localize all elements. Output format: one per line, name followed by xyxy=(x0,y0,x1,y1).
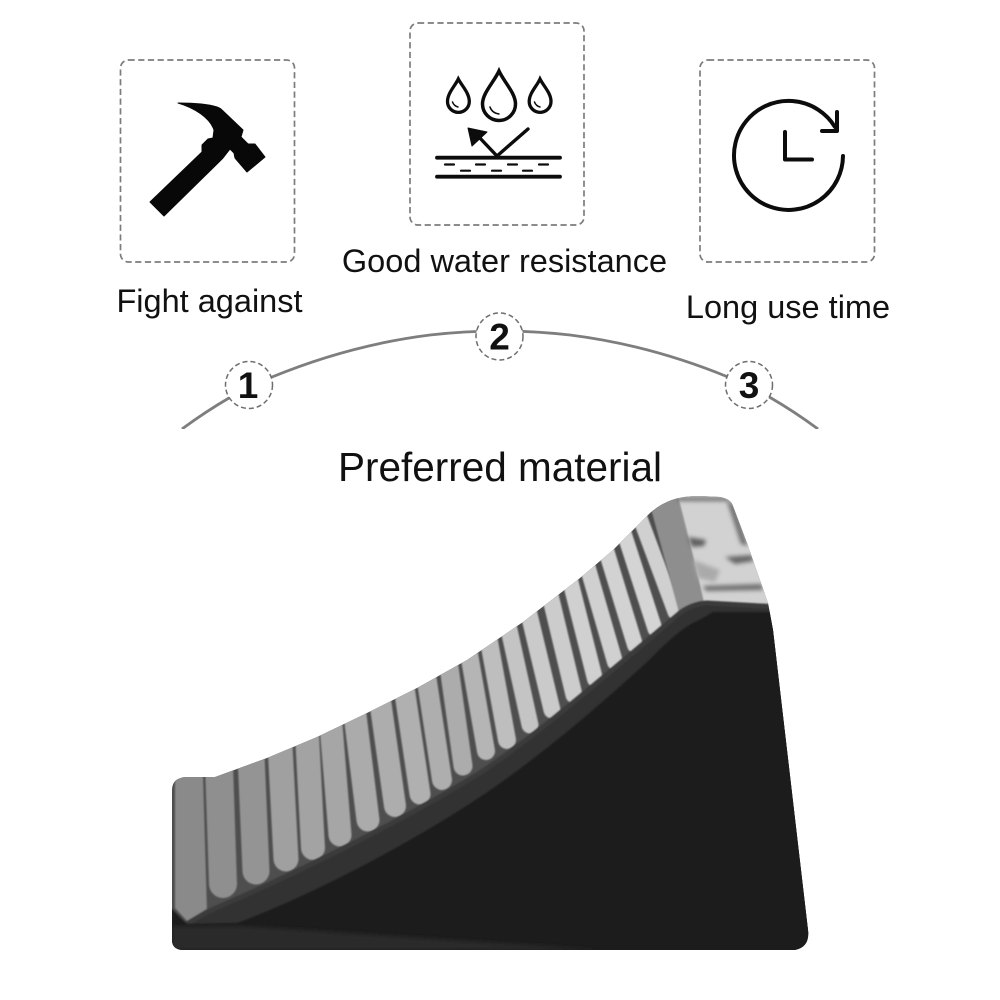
product photo: rubber wheel chock xyxy=(160,480,820,960)
marker 1 xyxy=(226,362,272,408)
card: clock xyxy=(700,60,874,262)
arc line xyxy=(182,331,818,429)
marker 1: 1 xyxy=(238,365,258,406)
icon: hammer xyxy=(150,103,265,216)
chock lip xyxy=(160,603,820,960)
card: water xyxy=(410,23,584,225)
left end strip xyxy=(175,775,207,922)
label: fight against: Fight against xyxy=(116,283,303,319)
icon: water drops on surface xyxy=(437,71,560,177)
panel: fight against xyxy=(116,60,303,319)
chock dark body xyxy=(160,612,820,960)
timeline arc with numbered markers xyxy=(182,313,818,429)
lower front edge shading xyxy=(172,926,546,950)
panel: long use time xyxy=(686,60,890,325)
marker 3: 3 xyxy=(739,365,759,406)
tread ribs xyxy=(219,518,675,884)
end cap xyxy=(651,496,770,612)
marker 2: 2 xyxy=(489,316,510,358)
card: hammer xyxy=(120,60,294,262)
marker 3 xyxy=(726,362,772,408)
marker 2 xyxy=(476,313,523,360)
chock ribbed top surface base xyxy=(160,480,820,960)
label: good water resistance: Good water resistance xyxy=(342,243,667,279)
panel: water resistance xyxy=(342,23,667,279)
heading: preferred material: Preferred material xyxy=(338,444,662,490)
label: long use time: Long use time xyxy=(686,289,890,325)
icon: clock with arrow xyxy=(734,101,843,210)
